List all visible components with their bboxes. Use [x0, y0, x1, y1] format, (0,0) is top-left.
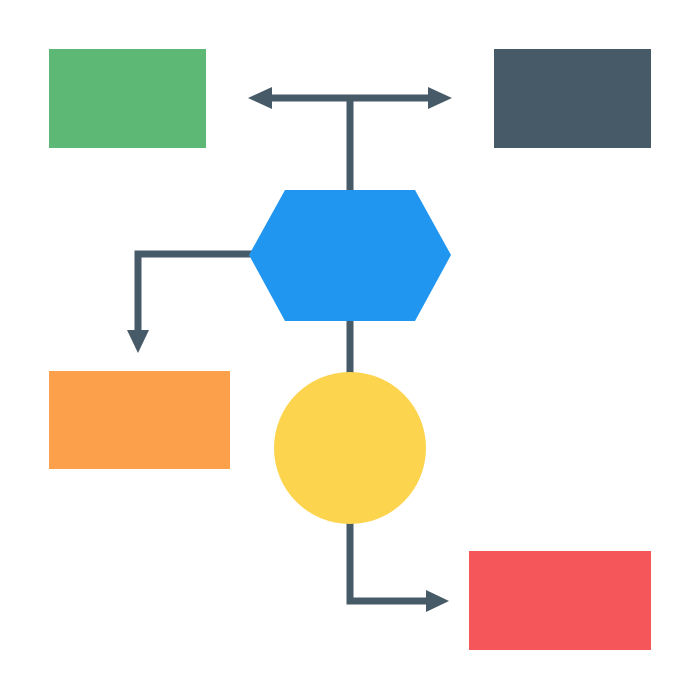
arrow: top double-headed: [248, 87, 452, 192]
connector: hexagon to circle: [346, 318, 354, 376]
circle: yellow: [274, 372, 426, 524]
box: orange: [49, 371, 230, 469]
box: green: [49, 49, 206, 148]
arrow: left down: [127, 254, 252, 353]
arrow: circle to red box: [350, 520, 449, 612]
box: dark slate: [494, 49, 651, 148]
hexagon: blue: [249, 190, 451, 321]
box: red: [469, 551, 651, 650]
